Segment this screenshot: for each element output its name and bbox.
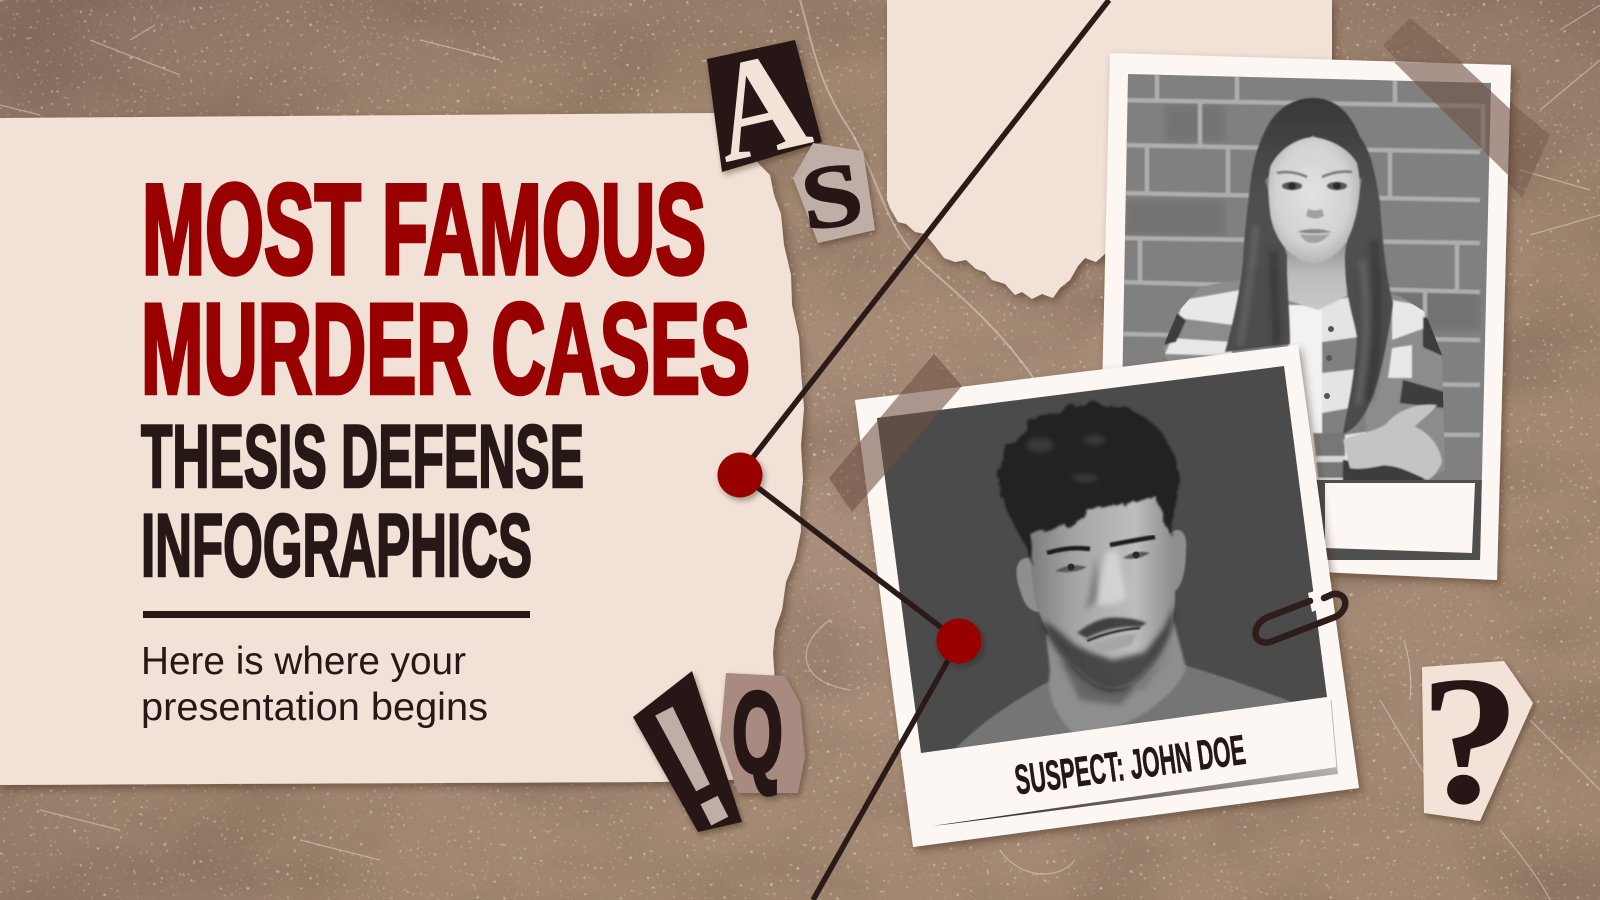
tagline text	[141, 640, 488, 729]
man: curly hair	[999, 403, 1177, 565]
photo frame: woman	[1098, 53, 1511, 580]
letter tile: question mark: ?	[1419, 638, 1521, 842]
woman: hair	[1225, 98, 1393, 434]
tape: over woman polaroid corner	[1394, 62, 1511, 176]
letter tile: S: S	[795, 143, 869, 250]
polaroid: woman	[1098, 53, 1511, 580]
torn paper: left title panel	[0, 113, 804, 785]
photo: woman against brick wall	[1110, 70, 1500, 570]
letter tile: Q: Q	[732, 669, 783, 797]
tagline text: presentation begins	[141, 686, 488, 729]
man: neck	[1046, 615, 1186, 735]
pin: upper	[718, 452, 762, 498]
woman: striped shirt	[1163, 280, 1445, 480]
tape: over man polaroid corner	[829, 354, 962, 512]
subtitle: thesis defense infographics: INFOGRAPHICS	[141, 495, 532, 595]
title: main heading: MURDER CASES	[141, 278, 750, 421]
subtitle: thesis defense infographics: THESIS DEFENSE	[141, 406, 584, 506]
woman: face	[1268, 137, 1360, 263]
letter tile: A: A	[697, 20, 822, 193]
string lines	[740, 0, 1109, 900]
woman: neck	[1285, 240, 1347, 310]
paperclip	[1255, 590, 1345, 643]
letter tile: Q	[720, 669, 805, 797]
letter tile: exclamation mark: !	[626, 666, 758, 865]
tape: behind woman polaroid	[1383, 18, 1550, 198]
tagline text: Here is where your	[141, 640, 466, 683]
title: main heading	[141, 158, 750, 421]
man: facial features	[1047, 537, 1155, 652]
caption sheet: woman polaroid	[1325, 483, 1475, 553]
pin: lower	[936, 618, 982, 664]
polaroid: man	[855, 345, 1359, 847]
man: t-shirt	[956, 665, 1292, 748]
subtitle: thesis defense infographics	[141, 406, 584, 595]
title: main heading: MOST FAMOUS	[142, 158, 706, 302]
photo frame: man	[855, 345, 1359, 847]
man: ears	[1017, 530, 1186, 612]
photo: man portrait	[877, 366, 1327, 753]
man: face	[1030, 495, 1175, 689]
man: beard	[1042, 605, 1175, 692]
woman: crossed arm and hand	[1343, 404, 1442, 482]
divider rule	[143, 611, 530, 618]
woman: facial features	[1277, 172, 1352, 243]
caption inner shadow line	[932, 700, 1338, 826]
torn paper: top centre	[887, 0, 1332, 299]
caption: suspect name: SUSPECT: JOHN DOE	[1012, 726, 1248, 803]
